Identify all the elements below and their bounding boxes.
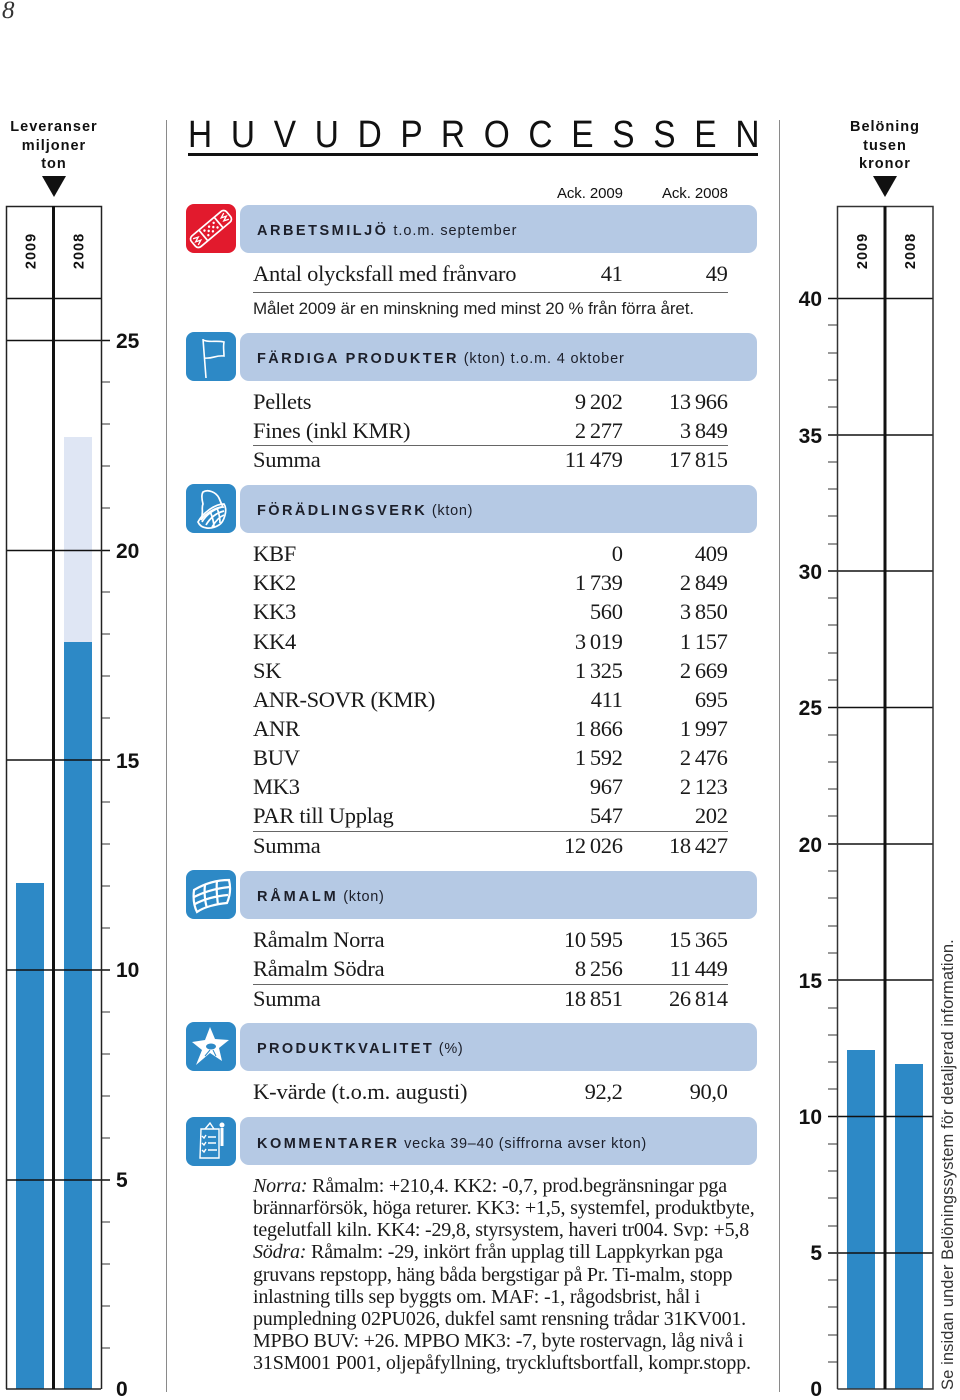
value: 92,2	[585, 1079, 623, 1104]
panel header text: produktkvalitet: PRODUKTKVALITET (%)	[257, 1041, 463, 1057]
row label: KK2	[253, 570, 296, 595]
value: 18 851	[564, 986, 623, 1011]
row label: Summa	[253, 986, 321, 1011]
value: 967	[590, 774, 623, 799]
icon: ore cart	[186, 870, 236, 919]
value: 3 850	[680, 599, 728, 624]
left chart heading: Leveranser	[10, 119, 98, 135]
value: 13 966	[669, 389, 728, 414]
title: H U V U D P R O C E S S E N	[188, 114, 764, 156]
row label: Råmalm Norra	[253, 927, 384, 952]
comment text block: brännarförsök, höga returer. KK3: +1,5, systemfel, produktbyte,	[253, 1197, 755, 1219]
left chart: leveranser: 20	[116, 540, 139, 563]
value: 8 256	[575, 956, 623, 981]
comment text block: 31SM001 P001, oljepåfyllning, tryckluftsbortfall, kompr.stopp.	[253, 1352, 751, 1374]
row label: SK	[253, 658, 281, 683]
divider right	[778, 120, 780, 1392]
value: 2 277	[575, 418, 623, 443]
right chart heading	[850, 119, 920, 172]
value: 3 019	[575, 629, 623, 654]
right chart: belöning: 25	[799, 697, 822, 720]
row label: ANR	[253, 716, 300, 741]
comment text block: gruvans repstopp, häng båda bergstigar på Pr. Ti-malm, stopp	[253, 1264, 732, 1286]
value: 90,0	[690, 1079, 728, 1104]
icon: flag	[186, 332, 236, 381]
value: 2 849	[680, 570, 728, 595]
value: 1 592	[575, 745, 623, 770]
comment text block: tegelutfall kiln. KK4: -29,8, styrsystem, haveri tr004. Svp: +5,8	[253, 1219, 749, 1241]
value: 411	[591, 687, 623, 712]
left chart: leveranser: 25	[116, 330, 140, 353]
right chart: belöning: 20	[799, 834, 822, 857]
value: 1 325	[575, 658, 623, 683]
left chart heading: miljoner	[22, 138, 86, 154]
row label: Summa	[253, 833, 321, 858]
value: 1 739	[575, 570, 623, 595]
column header 2008: Ack. 2008	[662, 185, 728, 202]
panel header: råmalm	[240, 871, 757, 919]
row: antal olycksfall: Antal olycksfall med frånvaro	[253, 261, 516, 286]
left chart heading: ton	[41, 156, 67, 172]
row label: K-värde (t.o.m. augusti)	[253, 1079, 467, 1104]
icon: checklist	[186, 1117, 236, 1166]
right chart: belöning: 10	[799, 1106, 822, 1129]
row label: KBF	[253, 541, 296, 566]
right chart: belöning: 5	[810, 1242, 822, 1265]
panel header: kommentarer	[240, 1117, 757, 1165]
comment text block: MPBO BUV: +26. MPBO MK3: -7, byte rostervagn, låg nivå i	[253, 1330, 743, 1352]
value: 560	[590, 599, 623, 624]
right chart: belöning: Se insidan under Belöningssystem för detaljerad information.	[939, 939, 957, 1390]
row label: Fines (inkl KMR)	[253, 418, 410, 443]
right chart heading: tusen	[863, 138, 907, 154]
value: 1 866	[575, 716, 623, 741]
left chart: leveranser: 2009	[24, 233, 40, 269]
value: 11 479	[565, 447, 623, 472]
value: 202	[695, 803, 728, 828]
divider left	[166, 120, 167, 1392]
right chart heading: kronor	[859, 156, 911, 172]
value: 1 157	[680, 629, 728, 654]
value: 49	[706, 261, 728, 286]
left chart: leveranser	[6, 176, 140, 1400]
comment text block: inlastning tills sep byggts om. MAF: -1, rågodsbrist, hål i	[253, 1286, 700, 1308]
panel header text: kommentarer: KOMMENTARER vecka 39–40 (siffrorna avser kton)	[257, 1136, 647, 1152]
left chart: leveranser: 5	[116, 1169, 128, 1192]
value: 2 123	[680, 774, 728, 799]
column header 2009: Ack. 2009	[557, 185, 623, 202]
icon: bandage	[186, 204, 236, 253]
value: 547	[590, 803, 623, 828]
panel header text: arbetsmiljö: ARBETSMILJÖ t.o.m. september	[257, 223, 517, 239]
comment text block: Norra: Råmalm: +210,4. KK2: -0,7, prod.begränsningar pga	[253, 1175, 727, 1197]
right chart: belöning: 2008	[903, 233, 919, 269]
panel header: förädlingsverk	[240, 485, 757, 533]
value: 3 849	[680, 418, 728, 443]
value: 17 815	[669, 447, 728, 472]
comment text block: pumpledning 02PU026, dukfel samt rensning trådar 31KV001.	[253, 1308, 746, 1330]
value: 2 476	[680, 745, 728, 770]
right chart: belöning: 30	[799, 561, 822, 584]
row label: PAR till Upplag	[253, 803, 393, 828]
value: 41	[601, 261, 623, 286]
icon: helmet	[186, 484, 236, 533]
left chart: leveranser: 10	[116, 959, 139, 982]
left chart: leveranser: 15	[116, 750, 140, 773]
value: 0	[612, 541, 623, 566]
value: 15 365	[669, 927, 728, 952]
value: 1 997	[680, 716, 728, 741]
right chart: belöning: 2009	[855, 233, 871, 269]
panel header: arbetsmiljö	[240, 205, 757, 253]
row label: Råmalm Södra	[253, 956, 384, 981]
panel header text: färdiga produkter: FÄRDIGA PRODUKTER (kton) t.o.m. 4 oktober	[257, 351, 625, 367]
comment text block	[252, 1175, 755, 1374]
row label: BUV	[253, 745, 300, 770]
value: 10 595	[564, 927, 623, 952]
value: 18 427	[669, 833, 728, 858]
comment text block: Södra: Råmalm: -29, inkört från upplag till Lappkyrkan pga	[253, 1241, 723, 1263]
panel header text: förädlingsverk: FÖRÄDLINGSVERK (kton)	[257, 503, 473, 519]
row label: KK3	[253, 599, 296, 624]
title underline	[188, 153, 758, 156]
value: 695	[695, 687, 728, 712]
value: 409	[695, 541, 728, 566]
right chart: belöning: 35	[799, 425, 822, 448]
row label: ANR-SOVR (KMR)	[253, 687, 435, 712]
value: 12 026	[564, 833, 623, 858]
right chart: belöning: 15	[799, 970, 822, 993]
row label: MK3	[253, 774, 300, 799]
value: 11 449	[670, 956, 728, 981]
right chart heading: Belöning	[850, 119, 920, 135]
value: 9 202	[575, 389, 623, 414]
left chart heading	[10, 119, 98, 172]
right chart: belöning: 40	[799, 288, 822, 311]
value: 2 669	[680, 658, 728, 683]
value: 26 814	[669, 986, 728, 1011]
panel header: färdiga produkter	[240, 333, 757, 381]
panel header: produktkvalitet	[240, 1023, 757, 1071]
icon: star	[186, 1022, 236, 1071]
note: målet 2009: Målet 2009 är en minskning med minst 20 % från förra året.	[253, 299, 694, 318]
left chart: leveranser: 2008	[72, 233, 88, 269]
right chart: belöning	[798, 176, 957, 1400]
row label: Pellets	[253, 389, 311, 414]
panel header text: råmalm: RÅMALM (kton)	[257, 889, 385, 905]
row label: Summa	[253, 447, 321, 472]
row label: KK4	[253, 629, 296, 654]
